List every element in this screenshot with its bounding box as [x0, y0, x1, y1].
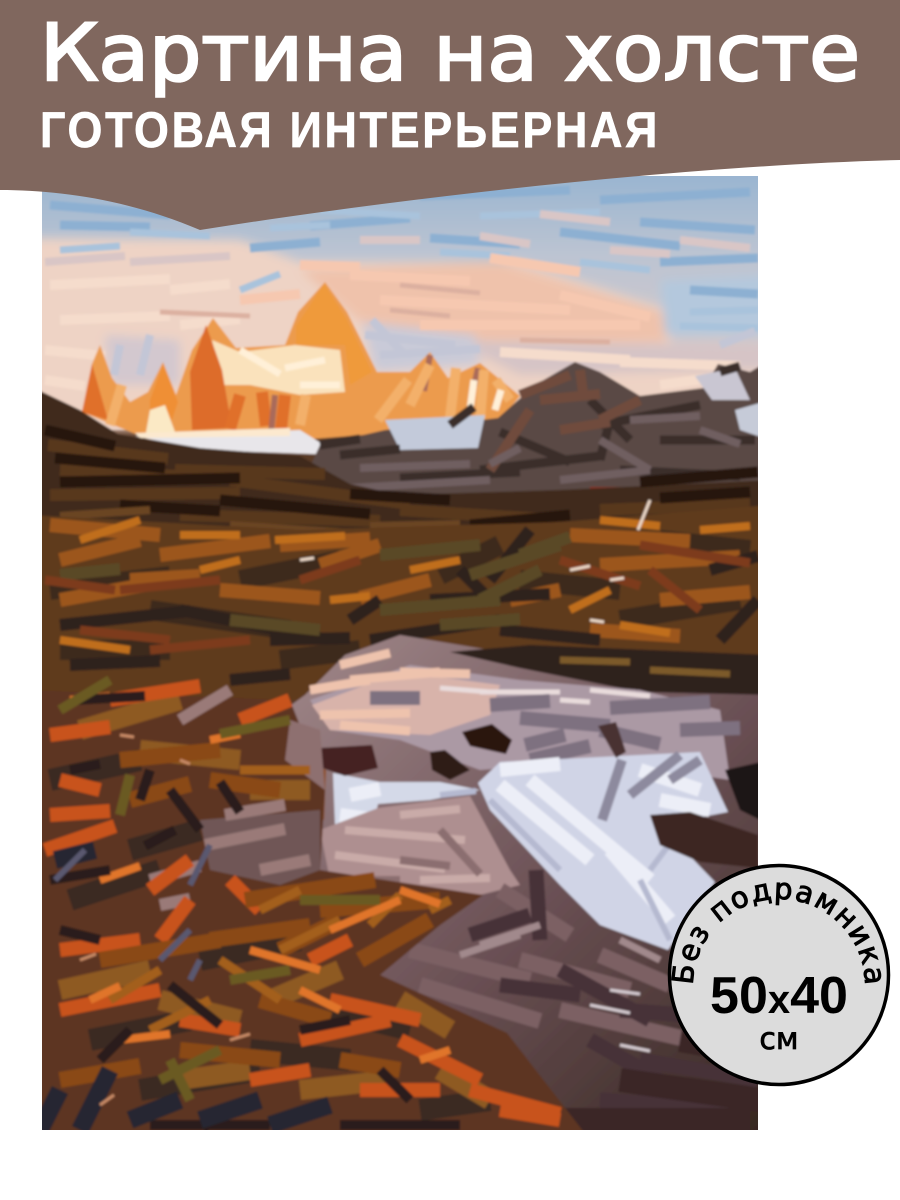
title: Картина на холсте: [40, 9, 860, 99]
dark far bank: [450, 645, 770, 695]
autumn meadow: [30, 500, 770, 700]
badge unit: см: [759, 1022, 799, 1057]
sky: [30, 160, 770, 430]
left hills and dark band: [42, 390, 758, 530]
white water: [478, 752, 728, 950]
pink riverbed: [320, 796, 520, 895]
river: [290, 633, 758, 1130]
subtitle: ГОТОВАЯ ИНТЕРЬЕРНАЯ: [40, 102, 660, 158]
peaks: [82, 282, 520, 455]
badge arc text: Без подрамника: [671, 882, 882, 984]
badge dimensions: 50x40: [710, 967, 848, 1025]
foreground autumn bushes: [30, 680, 590, 1140]
right dark mountains: [312, 360, 758, 496]
rocks: [462, 724, 512, 754]
painting: mountain landscape: [30, 160, 770, 1140]
badge: size without stretcher: [668, 864, 890, 1086]
banner header: [0, 0, 900, 230]
mauve patches: [200, 810, 320, 885]
